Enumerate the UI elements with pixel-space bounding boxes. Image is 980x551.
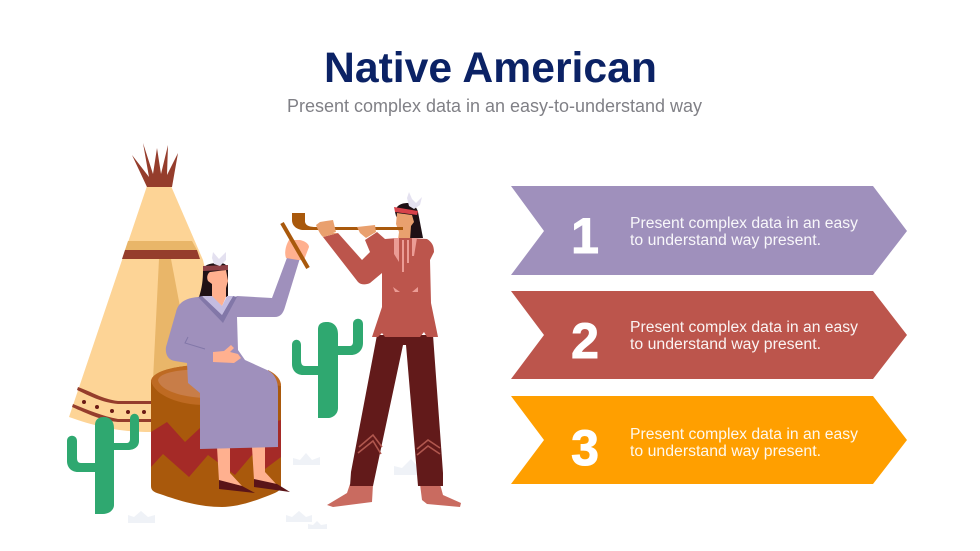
tipi bottom stripes [77, 387, 152, 404]
text block 2: to understand way present. [630, 336, 821, 353]
woman shoes [219, 480, 255, 493]
number 2: 2 [571, 313, 599, 369]
illustration: tipi [69, 143, 232, 432]
tipi dots [82, 400, 146, 414]
text block 1: to understand way present. [630, 232, 821, 249]
man feathers [407, 192, 422, 209]
man hair [395, 203, 423, 238]
man shirt [323, 232, 438, 337]
illustration: stump [151, 365, 281, 507]
tipi brown band [122, 250, 200, 259]
man headband [394, 207, 418, 215]
stump top [158, 369, 205, 398]
woman legs [217, 447, 242, 486]
title: Native American [324, 44, 657, 92]
subtitle: Present complex data in an easy-to-understand way [287, 96, 702, 116]
man face and neck [396, 213, 414, 240]
background grass tufts [128, 453, 420, 529]
man hands [316, 220, 338, 237]
icon: cactus left [67, 414, 139, 514]
arrow panel 2 [511, 291, 907, 379]
arrow panel 1 [511, 186, 907, 275]
woman collar [198, 296, 237, 323]
icon: cactus right [292, 319, 363, 418]
text block 2: Present complex data in an easy [630, 319, 858, 336]
trouser chevrons [358, 435, 440, 455]
woman feathers [212, 252, 226, 266]
illustration: standing man [292, 192, 461, 507]
man pipe [292, 213, 403, 230]
woman headband [203, 265, 228, 271]
woman sleeve fold [185, 337, 205, 349]
text block 3 [630, 426, 858, 460]
number 3: 3 [571, 420, 599, 476]
woman hair [199, 263, 228, 297]
stump zigzag [151, 420, 281, 477]
tipi upper band [125, 241, 197, 250]
man trousers [350, 335, 443, 486]
arrow panel 3 [511, 396, 907, 484]
woman lap hand [213, 345, 241, 363]
woman stick [282, 223, 308, 268]
text block 1: Present complex data in an easy [630, 215, 858, 232]
text block 2 [630, 319, 858, 353]
text block 3: to understand way present. [630, 443, 821, 460]
stump rim [151, 365, 205, 405]
man shirt details [393, 238, 418, 292]
tipi door [153, 259, 190, 380]
woman raised hand [285, 240, 309, 260]
text block 1 [630, 215, 858, 249]
tipi pole tips [132, 143, 178, 187]
number 1: 1 [571, 208, 599, 264]
text block 3: Present complex data in an easy [630, 426, 858, 443]
woman face [207, 270, 228, 306]
illustration: seated woman [166, 223, 309, 493]
man feet [327, 484, 373, 507]
woman dress [166, 255, 300, 449]
